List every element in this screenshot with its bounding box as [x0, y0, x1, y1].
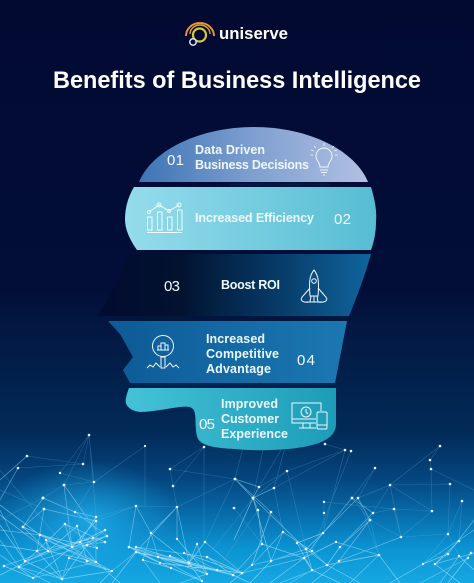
- title: Benefits of Business Intelligence: [53, 67, 421, 94]
- number 01: 01: [167, 152, 184, 169]
- icon: rocket: [301, 270, 327, 302]
- icon: line chart: [147, 203, 182, 232]
- label: improved customer experience: Experience: [221, 427, 288, 441]
- label: increased efficiency: Increased Efficiency: [195, 211, 314, 225]
- label: data driven business decisions: Business Decisions: [195, 158, 309, 172]
- panel: 04 competitive advantage: [108, 321, 347, 383]
- icon: light bulb: [310, 143, 338, 175]
- panel: 01 data driven: [139, 127, 368, 182]
- label: improved customer experience: Improved: [221, 397, 278, 411]
- icon: magnifier with chart: [147, 336, 179, 368]
- label: boost roi: Boost ROI: [221, 278, 280, 292]
- label: increased competitive advantage: Competitive: [206, 347, 279, 361]
- label: data driven business decisions: Data Driven: [195, 143, 265, 157]
- number 02: 02: [334, 211, 351, 228]
- number 03: 03: [164, 278, 180, 295]
- glow: network left: [0, 460, 180, 583]
- label: increased competitive advantage: Increased: [206, 332, 265, 346]
- logo: uniserve: uniserve: [219, 25, 288, 43]
- network: dense lower mesh: [0, 498, 474, 583]
- number 05: 05: [199, 416, 215, 433]
- panel: 03 boost roi: [98, 254, 371, 316]
- panel: 05 customer experience: [126, 388, 336, 450]
- label: increased competitive advantage: Advantage: [206, 362, 271, 376]
- panel: 02 increased efficiency: [125, 187, 376, 250]
- shadow: below band 1: [230, 183, 330, 186]
- network: nodes: [3, 434, 472, 582]
- network: faint connections: [0, 435, 474, 570]
- network: bright connections: [0, 456, 474, 583]
- label: improved customer experience: Customer: [221, 412, 279, 426]
- icon: desktop and phone: [292, 403, 327, 429]
- logo: uniserve: [186, 23, 288, 45]
- number 04: 04: [297, 352, 315, 369]
